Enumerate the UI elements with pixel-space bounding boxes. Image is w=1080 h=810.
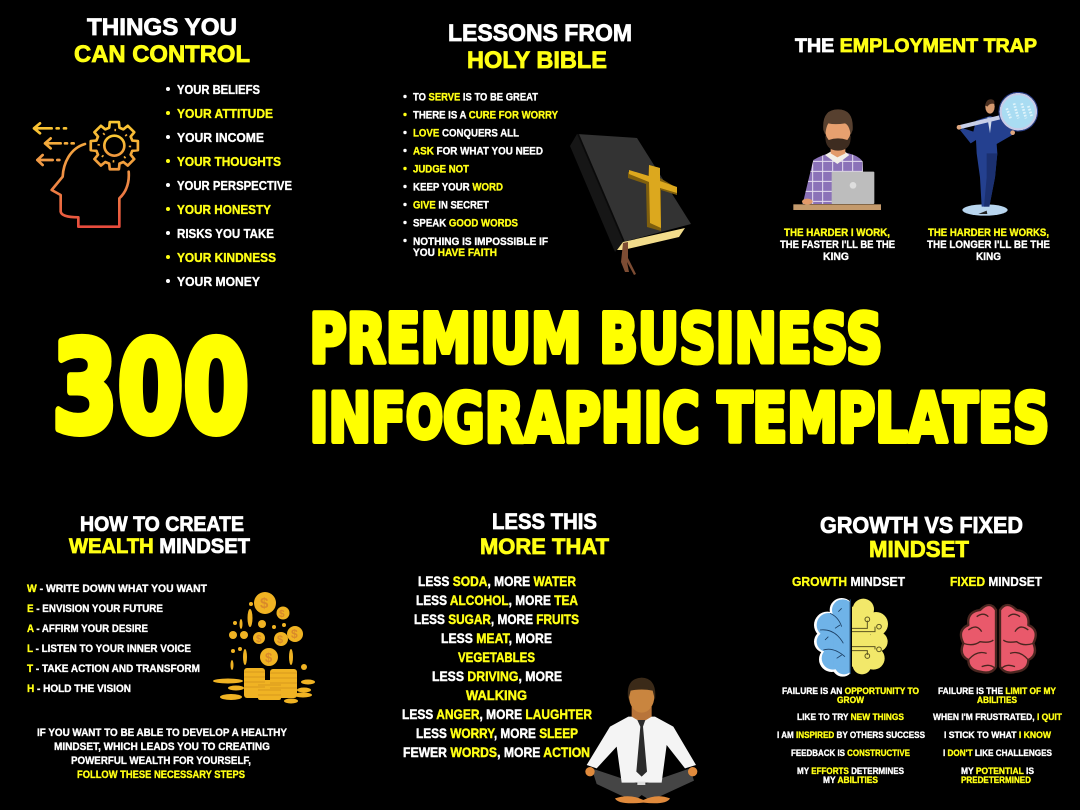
heading: employment trap: THE EMPLOYMENT TRAP <box>795 35 1037 57</box>
list: things you can control: YOUR KINDNESS <box>177 250 276 265</box>
caption: the harder I work <box>780 227 895 263</box>
icon: bible <box>570 134 691 275</box>
list: wealth acronym <box>27 583 207 695</box>
comparison: fixed mindset statements: WHEN I'M FRUSTRATED, I QUIT <box>933 712 1062 723</box>
icon: gold coins: $ <box>265 650 273 665</box>
comparison: fixed mindset statements: I STICK TO WHAT I KNOW <box>944 730 1051 741</box>
icon: fixed brain <box>961 605 1036 673</box>
list: wealth acronym: A - AFFIRM YOUR DESIRE <box>27 623 148 635</box>
heading: growth vs fixed mindset: MINDSET <box>869 536 969 562</box>
icon: growth brain <box>814 598 888 677</box>
heading: lessons from holy bible: LESSONS FROM <box>448 20 632 47</box>
comparison: fixed mindset statements <box>933 686 1062 786</box>
caption: the harder I work: THE FASTER I'LL BE THE <box>780 239 895 251</box>
list: things you can control: YOUR ATTITUDE <box>177 106 273 121</box>
list: wealth acronym: L - LISTEN TO YOUR INNER VOICE <box>27 643 191 655</box>
illustration: meditating businessman <box>585 678 697 803</box>
subheading: fixed mindset: FIXED MINDSET <box>950 574 1042 589</box>
caption: the harder I work: KING <box>823 251 849 263</box>
title: 300: 300 <box>52 314 249 461</box>
list: things you can control <box>166 82 292 289</box>
text block: healthy mindset paragraph: POWERFUL WEALTH FOR YOURSELF, <box>71 755 251 767</box>
list: wealth acronym: H - HOLD THE VISION <box>27 683 131 695</box>
heading: lessons from holy bible: HOLY BIBLE <box>467 47 607 74</box>
comparison: growth mindset statements: I AM INSPIRED BY OTHERS SUCCESS <box>777 730 925 741</box>
list: bible lessons: GIVE IN SECRET <box>413 200 489 212</box>
heading: things you can control <box>74 14 250 68</box>
list: bible lessons: THERE IS A CURE FOR WORRY <box>413 110 559 122</box>
title: premium business infographic templates <box>310 300 1050 458</box>
caption: the harder I work: THE HARDER I WORK, <box>784 227 890 239</box>
heading: wealth mindset: HOW TO CREATE <box>80 512 244 536</box>
icon: gold coins <box>213 592 315 704</box>
comparison: fixed mindset statements: FAILURE IS THE LIMIT OF MY <box>938 686 1057 697</box>
list: things you can control: YOUR INCOME <box>177 130 264 145</box>
list: things you can control: YOUR PERSPECTIVE <box>177 178 292 193</box>
list: wealth acronym: T - TAKE ACTION AND TRANSFORM <box>27 663 200 675</box>
caption: the harder he works: KING <box>976 251 1001 263</box>
panel: lessons from holy bible <box>403 20 691 275</box>
list: bible lessons: YOU HAVE FAITH <box>413 247 497 259</box>
list: things you can control: RISKS YOU TAKE <box>177 226 274 241</box>
heading: less this more that <box>480 509 609 559</box>
list: things you can control: YOUR BELIEFS <box>177 82 260 97</box>
heading: growth vs fixed mindset: GROWTH VS FIXED <box>820 512 1023 538</box>
list: bible lessons: KEEP YOUR WORD <box>413 182 503 194</box>
comparison: fixed mindset statements: ABILITIES <box>977 695 1017 706</box>
heading: wealth mindset <box>69 512 250 558</box>
title: premium business infographic templates: O <box>406 384 443 452</box>
icon: gold coins: $ <box>279 609 285 620</box>
text block: healthy mindset paragraph <box>37 727 288 781</box>
list: less and more: WALKING <box>466 687 527 703</box>
list: less and more: LESS SODA, MORE WATER <box>418 573 576 589</box>
list: less and more: FEWER WORDS, MORE ACTION <box>403 744 590 760</box>
title: premium business infographic templates: INF <box>310 380 438 458</box>
illustration: man with laptop <box>793 109 881 210</box>
icon: gold coins: $ <box>256 634 262 645</box>
comparison: fixed mindset statements: PREDETERMINED <box>961 775 1031 786</box>
panel: less this more that <box>402 509 697 803</box>
list: bible lessons: SPEAK GOOD WORDS <box>413 218 518 230</box>
list: things you can control: YOUR MONEY <box>177 274 260 289</box>
comparison: growth mindset statements <box>777 686 925 786</box>
list: bible lessons: NOTHING IS IMPOSSIBLE IF <box>413 236 548 248</box>
list: less and more: LESS MEAT, MORE <box>441 630 552 646</box>
list: less and more: LESS WORRY, MORE SLEEP <box>416 725 578 741</box>
comparison: growth mindset statements: MY EFFORTS DETERMINES <box>797 766 904 777</box>
comparison: growth mindset statements: LIKE TO TRY NEW THINGS <box>797 712 904 723</box>
caption: the harder he works: THE HARDER HE WORKS, <box>928 227 1049 239</box>
list: bible lessons: TO SERVE IS TO BE GREAT <box>413 92 538 104</box>
list: less and more: VEGETABLES <box>458 649 535 665</box>
list: less and more: LESS ALCOHOL, MORE TEA <box>416 592 578 608</box>
icon: gold coins: $ <box>260 595 269 612</box>
heading: growth vs fixed mindset <box>820 512 1023 562</box>
list: bible lessons: ASK FOR WHAT YOU NEED <box>413 146 543 158</box>
comparison: growth mindset statements: FEEDBACK IS CONSTRUCTIVE <box>791 748 910 759</box>
heading: things you can control: THINGS YOU <box>87 14 237 41</box>
subheading: growth mindset: GROWTH MINDSET <box>792 574 905 589</box>
title: premium business infographic templates: PREMIUM BUSINESS <box>310 300 882 379</box>
text block: healthy mindset paragraph: FOLLOW THESE NECESSARY STEPS <box>77 769 245 781</box>
heading: things you can control: CAN CONTROL <box>74 41 250 68</box>
comparison: growth mindset statements: MY ABILITIES <box>823 775 878 786</box>
heading: less this more that: LESS THIS <box>492 509 597 534</box>
icon: head with gear <box>34 122 138 227</box>
icon: gold coins: $ <box>277 634 283 646</box>
comparison: fixed mindset statements: I DON'T LIKE CHALLENGES <box>943 748 1052 759</box>
list: less and more <box>402 573 592 760</box>
list: bible lessons <box>403 92 559 259</box>
list: bible lessons: JUDGE NOT <box>413 164 469 176</box>
caption: the harder he works: THE LONGER I'LL BE THE <box>927 239 1050 251</box>
list: wealth acronym: E - ENVISION YOUR FUTURE <box>27 603 163 615</box>
caption: the harder he works <box>927 227 1050 263</box>
heading: wealth mindset: WEALTH MINDSET <box>69 534 250 558</box>
comparison: growth mindset statements: GROW <box>837 695 864 706</box>
list: things you can control: YOUR THOUGHTS <box>177 154 281 169</box>
heading: less this more that: MORE THAT <box>480 534 609 559</box>
comparison: fixed mindset statements: MY POTENTIAL IS <box>961 766 1034 777</box>
icon: gold coins: $ <box>291 627 298 641</box>
list: less and more: LESS DRIVING, MORE <box>432 668 562 684</box>
list: less and more: LESS ANGER, MORE LAUGHTER <box>402 706 592 722</box>
list: wealth acronym: W - WRITE DOWN WHAT YOU WANT <box>27 583 207 595</box>
panel: how to create wealth mindset <box>27 512 315 781</box>
text block: healthy mindset paragraph: IF YOU WANT TO BE ABLE TO DEVELOP A HEALTHY <box>37 727 288 739</box>
heading: lessons from holy bible <box>448 20 632 74</box>
comparison: growth mindset statements: FAILURE IS AN OPPORTUNITY TO <box>782 686 919 697</box>
text block: healthy mindset paragraph: MINDSET, WHICH LEADS YOU TO CREATING <box>54 741 270 753</box>
list: less and more: LESS SUGAR, MORE FRUITS <box>414 611 579 627</box>
panel: things you can control <box>34 14 292 289</box>
list: things you can control: YOUR HONESTY <box>177 202 271 217</box>
panel: growth vs fixed mindset <box>777 512 1062 786</box>
list: bible lessons: LOVE CONQUERS ALL <box>413 128 519 140</box>
panel: the employment trap <box>780 35 1050 263</box>
illustration: man with magnifier <box>957 92 1038 216</box>
